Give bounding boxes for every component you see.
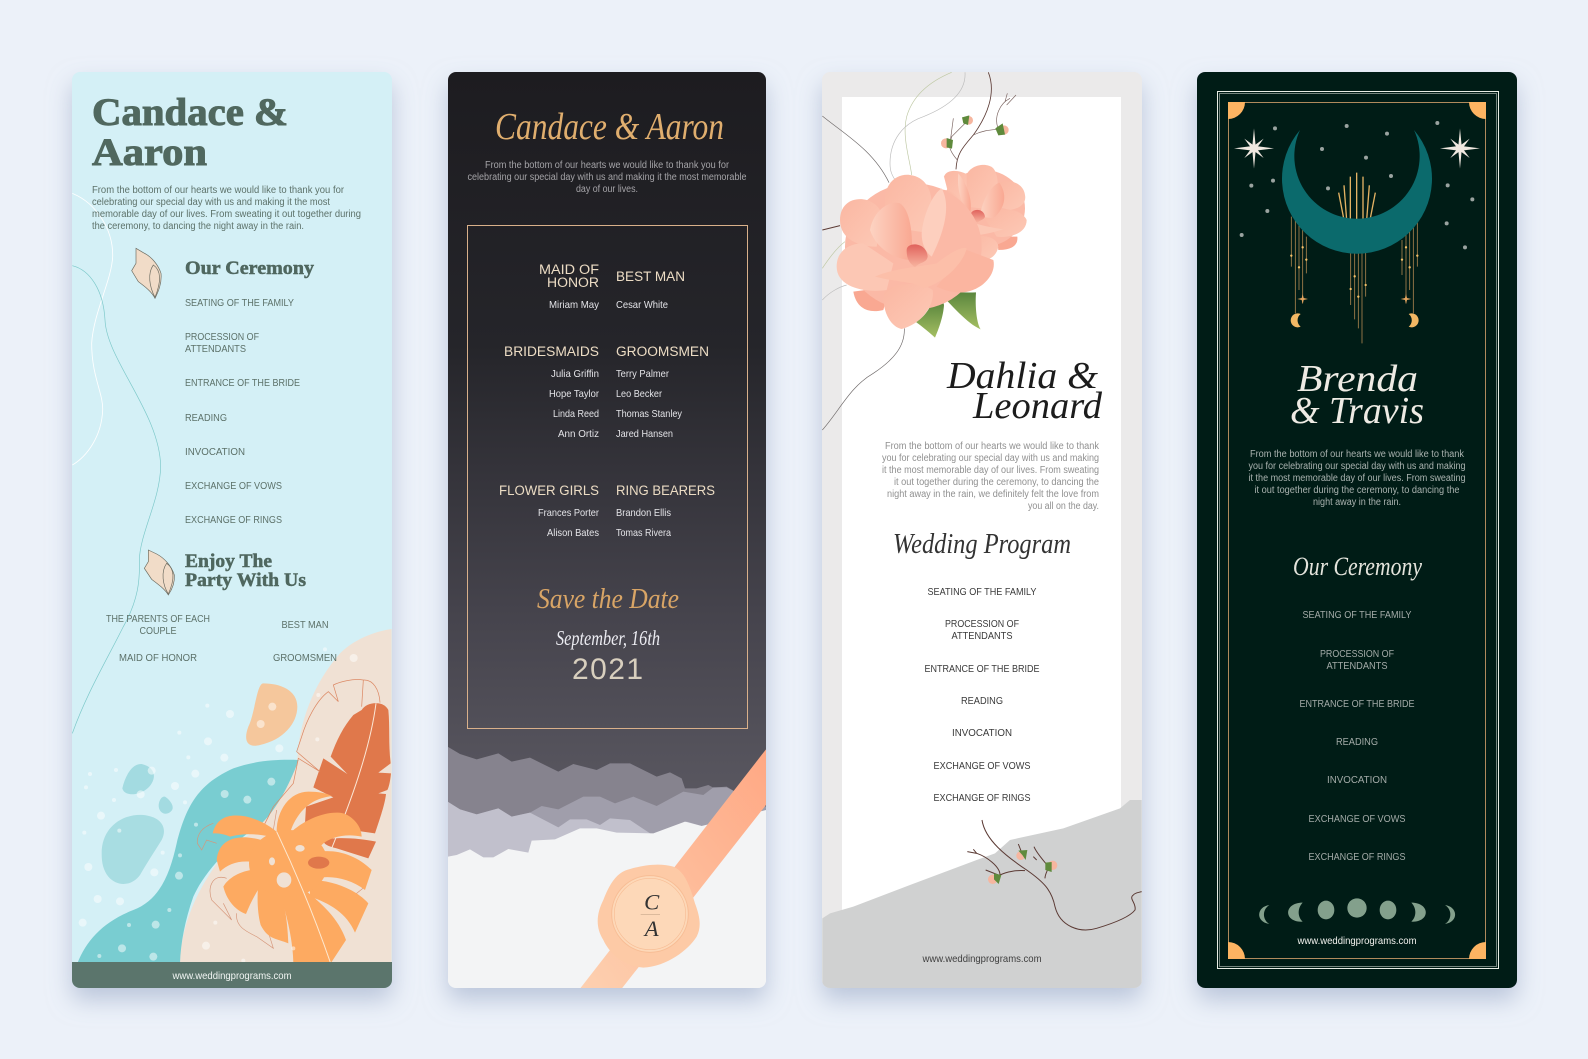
names right — [616, 299, 683, 539]
names right: Jared Hansen — [616, 428, 673, 440]
panel: card 2 dark Candace and Aaron — [448, 72, 766, 989]
intro paragraph: it the most memorable day of our lives. From sweating — [1248, 473, 1466, 484]
buds — [988, 850, 1057, 884]
intro paragraph: the ceremony, to dancing the night away in the rain. — [92, 221, 304, 232]
title: Leonard — [972, 385, 1103, 427]
gold frame and corners — [1228, 102, 1486, 959]
wedding party roles right — [616, 269, 715, 498]
ceremony list — [185, 298, 300, 526]
wedding party roles right: GROOMSMEN — [616, 344, 709, 359]
ceremony list: READING — [1336, 737, 1378, 748]
save the date: Save the Date — [537, 583, 679, 615]
ceremony list: ENTRANCE OF THE BRIDE — [1300, 699, 1415, 710]
crescent — [1282, 130, 1432, 254]
grey dots — [1240, 121, 1474, 249]
intro paragraph: you for celebrating our special day with us and making — [1248, 461, 1466, 472]
intro paragraph: From the bottom of our hearts we would like to thank you for — [485, 160, 730, 171]
icon: seashell — [132, 248, 161, 298]
icon: wax seal — [598, 865, 700, 968]
title — [92, 91, 288, 174]
names left: Linda Reed — [553, 408, 599, 420]
intro paragraph: celebrating our special day with us and making it the most memorable — [468, 172, 747, 183]
party list: THE PARENTS OF EACH — [106, 614, 210, 625]
names right: Cesar White — [616, 299, 668, 311]
intro paragraph: memorable day of our lives. From sweating it out together during — [92, 209, 361, 220]
ceremony list: EXCHANGE OF RINGS — [1308, 852, 1406, 863]
gray torn paper — [822, 800, 1142, 988]
heading: Wedding Program: Wedding Program — [893, 528, 1071, 560]
moon phases — [1259, 898, 1455, 924]
intro paragraph: From the bottom of our hearts we would like to thank you for — [92, 185, 345, 196]
names right: Leo Becker — [616, 388, 662, 400]
icon: seashell 2 — [144, 550, 174, 595]
title: Candace & Aaron — [495, 106, 724, 148]
intro paragraph — [92, 185, 361, 232]
names right: Brandon Ellis — [616, 507, 671, 519]
party list: BEST MAN — [282, 620, 328, 631]
save the date: 2021 — [572, 653, 643, 686]
ceremony list: ENTRANCE OF THE BRIDE — [185, 378, 300, 389]
title: & Travis — [1290, 390, 1424, 432]
party list: MAID OF HONOR — [119, 653, 197, 664]
names left: Julia Griffin — [551, 368, 599, 380]
save the date: September, 16th — [556, 626, 660, 650]
party list: COUPLE — [140, 626, 177, 637]
program list: SEATING OF THE FAMILY — [928, 587, 1037, 598]
wedding party roles — [499, 262, 599, 498]
sparkle stars — [1234, 128, 1480, 169]
program list — [924, 587, 1040, 804]
gold rays — [1339, 173, 1375, 220]
white paper panel — [842, 97, 1121, 937]
names right: Terry Palmer — [616, 368, 669, 380]
wedding party roles right: BEST MAN — [616, 269, 685, 284]
small stars — [1297, 294, 1308, 304]
frame — [468, 226, 748, 728]
right flower — [997, 237, 1017, 250]
ceremony list: EXCHANGE OF VOWS — [185, 481, 282, 492]
intro paragraph — [1248, 449, 1466, 508]
intro paragraph: From the bottom of our hearts we would like to thank — [1250, 449, 1465, 460]
heading: Our Ceremony: Our Ceremony — [185, 258, 315, 279]
program list: EXCHANGE OF RINGS — [934, 793, 1031, 804]
small moons — [1291, 313, 1301, 327]
ceremony list: PROCESSION OF — [1320, 649, 1394, 660]
beads — [1290, 246, 1418, 298]
ceremony list: SEATING OF THE FAMILY — [1302, 610, 1412, 621]
wedding party roles right: RING BEARERS — [616, 483, 715, 498]
names right: Thomas Stanley — [616, 408, 683, 420]
names left — [538, 299, 600, 539]
program list: EXCHANGE OF VOWS — [934, 761, 1031, 772]
intro paragraph: you all on the day. — [1028, 501, 1099, 512]
moon illustration — [1234, 121, 1480, 343]
buds — [941, 138, 948, 148]
heading: Enjoy The Party With Us — [185, 552, 306, 591]
wedding party roles: MAID OF — [539, 262, 599, 277]
ceremony list: EXCHANGE OF RINGS — [185, 515, 282, 526]
torn paper layers: A — [643, 916, 659, 941]
title: Aaron — [92, 131, 207, 174]
monstera leaf — [213, 792, 372, 963]
double white frame — [1218, 92, 1498, 968]
footer url: www.weddingprograms.com — [1297, 936, 1416, 947]
vines — [822, 72, 1016, 430]
title — [1290, 358, 1424, 432]
left flower — [853, 290, 884, 312]
white dots — [79, 647, 358, 963]
party list — [106, 614, 337, 664]
names left: Frances Porter — [538, 507, 599, 519]
decorative curves — [72, 193, 161, 733]
leaves — [948, 292, 981, 330]
pendant strands — [1291, 217, 1417, 343]
save the date — [537, 583, 679, 686]
branch — [967, 820, 1142, 930]
banana leaf — [305, 703, 391, 833]
program list: PROCESSION OF — [945, 619, 1019, 630]
intro paragraph: it out together during the ceremony, to dancing the — [1254, 485, 1460, 496]
panel: card 4 Brenda and Travis celestial — [1197, 72, 1517, 988]
ceremony list — [1300, 610, 1415, 863]
ceremony list: PROCESSION OF — [185, 332, 259, 343]
torn paper layers — [448, 747, 766, 989]
program list: INVOCATION — [952, 728, 1012, 739]
heading: Our Ceremony: Our Ceremony — [1293, 552, 1422, 581]
party list: GROOMSMEN — [273, 653, 337, 664]
intro paragraph: you for celebrating our special day with us and making — [882, 453, 1099, 464]
panel: card 3 Dahlia and Leonard floral — [822, 72, 1142, 988]
ceremony list: EXCHANGE OF VOWS — [1308, 814, 1406, 825]
title: Brenda — [1297, 358, 1418, 400]
intro paragraph: day of our lives. — [576, 184, 638, 195]
bottom tropical illustration — [77, 629, 392, 963]
intro paragraph: night away in the rain. — [1313, 497, 1401, 508]
footer url: www.weddingprograms.com — [922, 954, 1042, 965]
names right: Tomas Rivera — [616, 527, 671, 539]
program list: READING — [961, 696, 1003, 707]
ceremony list: READING — [185, 413, 227, 424]
names left: Ann Ortiz — [558, 428, 599, 440]
title — [946, 355, 1103, 427]
names left: Miriam May — [549, 299, 600, 311]
ceremony list: ATTENDANTS — [185, 344, 246, 355]
intro paragraph: it the most memorable day of our lives. From sweating — [882, 465, 1099, 476]
intro paragraph: From the bottom of our hearts we would like to thank — [885, 441, 1100, 452]
ceremony list: INVOCATION — [185, 447, 245, 458]
wedding party roles: FLOWER GIRLS — [499, 483, 599, 498]
floral illustration — [822, 72, 1027, 430]
footer url: www.weddingprograms.com — [172, 971, 292, 982]
ceremony list: ATTENDANTS — [1326, 661, 1388, 672]
intro paragraph — [882, 441, 1100, 512]
panel: card 1 Candace and Aaron teal — [72, 72, 392, 988]
names left: Hope Taylor — [549, 388, 599, 400]
heading: Enjoy The Party With Us: Party With Us — [185, 571, 306, 591]
intro paragraph — [468, 160, 747, 195]
footer bar — [72, 962, 392, 988]
wedding party roles: HONOR — [547, 275, 599, 290]
ribbon — [580, 749, 766, 989]
intro paragraph: it out together during the ceremony, to dancing the — [894, 477, 1099, 488]
wedding party roles: BRIDESMAIDS — [504, 344, 599, 359]
program list: ENTRANCE OF THE BRIDE — [924, 664, 1040, 675]
names left: Alison Bates — [547, 527, 599, 539]
title: Dahlia & — [946, 355, 1098, 397]
program list: ATTENDANTS — [952, 631, 1013, 642]
title: Candace & — [92, 91, 288, 134]
ceremony list: SEATING OF THE FAMILY — [185, 298, 294, 309]
ceremony list: INVOCATION — [1327, 775, 1387, 786]
intro paragraph: night away in the rain, we definitely felt the love from — [887, 489, 1099, 500]
heading: Enjoy The Party With Us: Enjoy The — [185, 552, 272, 572]
torn paper layers: C — [644, 889, 660, 914]
intro paragraph: celebrating our special day with us and making it the most — [92, 197, 330, 208]
